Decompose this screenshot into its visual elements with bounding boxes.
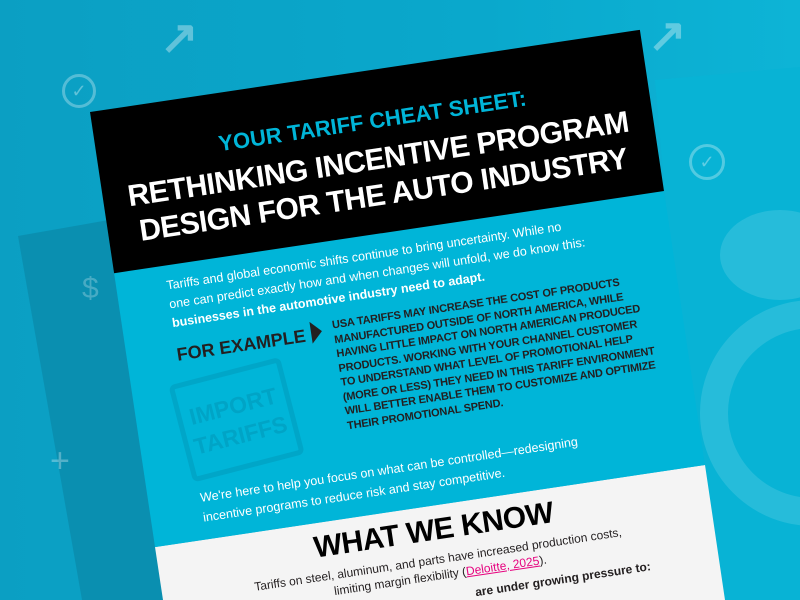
icon: arrow right: ↗ — [648, 9, 687, 61]
for example label: FOR EXAMPLE — [175, 326, 307, 365]
stamp: import tariffs: IMPORT — [187, 382, 280, 430]
body text: Tariffs on steel, aluminum, and parts have increased production costs, — [253, 525, 623, 594]
bold line: are under growing pressure to: — [474, 559, 652, 599]
subtitle: YOUR TARIFF CHEAT SHEET: — [217, 86, 528, 156]
icon: check left: ✓ — [71, 81, 87, 101]
example text: (MORE OR LESS) THEY NEED IN THIS TARIFF ENVIRONMENT — [342, 345, 656, 403]
background sheet: dark left — [18, 191, 346, 600]
icon: blob — [720, 210, 800, 300]
stamp: import tariffs: TARIFFS — [191, 411, 290, 460]
heading: what we know: WHAT WE KNOW — [312, 496, 556, 564]
title: RETHINKING INCENTIVE PROGRAM — [126, 106, 631, 213]
example text: USA TARIFFS MAY INCREASE THE COST OF PRODUCTS — [331, 277, 620, 331]
white section of document — [155, 465, 725, 600]
document — [90, 30, 705, 547]
icon: check left — [62, 74, 96, 108]
icon: arrow left: ↗ — [160, 11, 199, 63]
example text — [331, 277, 656, 432]
icon: check right: ✓ — [699, 152, 715, 172]
closing text: incentive programs to reduce risk and stay competitive. — [202, 466, 506, 525]
example text: PRODUCTS. WORKING WITH YOUR CHANNEL CUSTOMER — [338, 318, 638, 374]
background sheet: light right — [655, 67, 800, 600]
title: DESIGN FOR THE AUTO INDUSTRY — [137, 142, 630, 248]
icon: dollar: $ — [82, 272, 99, 305]
intro text: one can predict exactly how and when changes will unfold, we do know this: — [168, 235, 586, 311]
icon: large ring — [714, 314, 800, 512]
example text: TO UNDERSTAND WHAT LEVEL OF PROMOTIONAL HELP — [340, 333, 634, 389]
example text: MANUFACTURED OUTSIDE OF NORTH AMERICA, WHILE — [333, 291, 624, 346]
body text: limiting margin flexibility (Deloitte, 2025). — [333, 553, 548, 598]
icon: plus: + — [50, 442, 70, 480]
closing text: We're here to help you focus on what can be controlled—redesigning — [199, 435, 579, 505]
header block — [90, 30, 664, 273]
example text: HAVING LITTLE IMPACT ON NORTH AMERICAN PRODUCED — [336, 303, 641, 360]
stamp: import tariffs — [168, 357, 305, 483]
example text: WILL BETTER ENABLE THEM TO CUSTOMIZE AND OPTIMIZE — [344, 359, 656, 418]
intro text: Tariffs and global economic shifts continue to bring uncertainty. While no — [165, 220, 562, 293]
intro text — [165, 220, 586, 330]
example text: THEIR PROMOTIONAL SPEND. — [346, 397, 504, 432]
icon: check right — [689, 144, 725, 180]
intro text: businesses in the automotive industry need to adapt. — [171, 270, 486, 330]
icon: triangle — [309, 320, 324, 344]
